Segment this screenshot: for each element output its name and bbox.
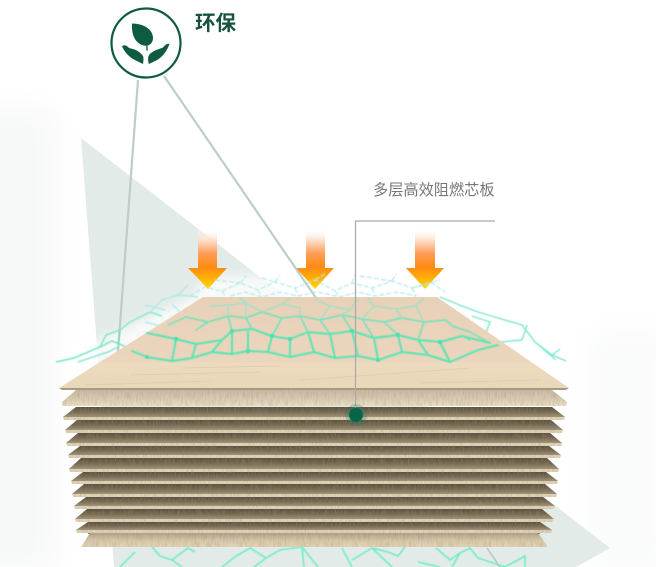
grey line behind bottom mesh xyxy=(487,548,500,567)
label: core board: 多层高效阻燃芯板 xyxy=(373,181,494,199)
icon: eco badge xyxy=(112,8,180,78)
heading: eco: 环保 xyxy=(195,12,236,35)
board layer 3 xyxy=(63,407,565,420)
bottom mesh below the stack xyxy=(120,547,525,567)
shadow under top board xyxy=(59,388,569,390)
board layer 10 xyxy=(74,497,555,509)
heat arrow: right xyxy=(406,228,444,289)
support line: left xyxy=(118,80,138,352)
support line: right xyxy=(164,76,316,298)
far mesh cells xyxy=(210,298,424,322)
pale background triangle xyxy=(81,138,610,567)
stacked core boards xyxy=(62,390,567,547)
leader line xyxy=(356,221,495,415)
mesh junction dots xyxy=(145,329,442,362)
board layer 11 xyxy=(75,509,554,522)
stack backing shadow xyxy=(84,407,544,534)
icon: right hand xyxy=(148,44,170,64)
right mesh extension xyxy=(440,297,566,361)
board layer 8 xyxy=(71,472,558,484)
top board surface xyxy=(59,297,569,388)
pale translucent mesh plane xyxy=(50,276,572,364)
middle mesh cells xyxy=(168,312,490,343)
left mesh extension xyxy=(56,285,198,362)
bottom board xyxy=(81,533,548,547)
heat arrow: middle xyxy=(296,228,334,289)
board layer 2 xyxy=(62,390,567,406)
heat arrow: left xyxy=(188,228,227,289)
board layer 6 xyxy=(68,446,561,458)
board layer 7 xyxy=(69,458,559,472)
upper faded mesh beyond the board xyxy=(190,274,445,297)
board layer 4 xyxy=(65,420,563,433)
board layer 9 xyxy=(72,484,557,497)
icon: left hand xyxy=(122,45,143,64)
green mesh on top board xyxy=(132,298,498,362)
icon: leaf xyxy=(132,24,153,50)
board layer 5 xyxy=(66,433,562,446)
callout dot xyxy=(345,404,367,426)
wood grain on top board xyxy=(85,366,540,385)
board layer 12 xyxy=(76,522,552,533)
near mesh cells xyxy=(132,329,498,362)
